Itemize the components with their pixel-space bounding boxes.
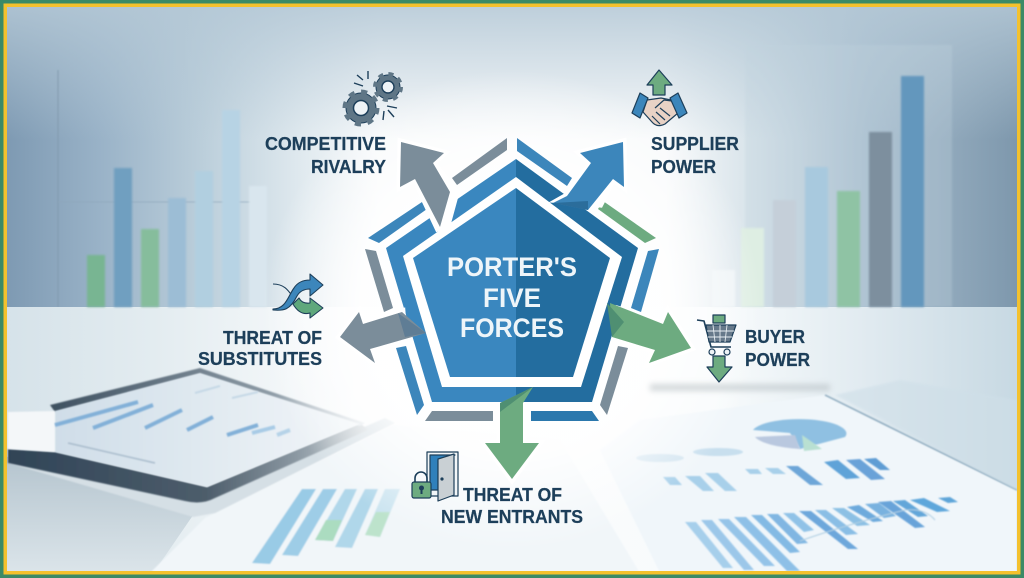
report sheet, lower right <box>600 380 1017 573</box>
label: threat of new entrants: THREAT OF <box>463 485 562 505</box>
center title: PORTER'S <box>447 252 577 282</box>
label: buyer power: POWER <box>745 350 810 370</box>
arrow: buyer power <box>607 303 691 363</box>
arrow: threat of new entrants <box>485 387 539 479</box>
label: competitive rivalry: RIVALRY <box>311 157 386 177</box>
label: threat of substitutes <box>198 328 322 369</box>
soft white glow behind diagram <box>262 70 762 550</box>
center pentagon <box>413 188 610 377</box>
arrow: competitive rivalry <box>400 142 456 228</box>
label: competitive rivalry <box>265 134 386 177</box>
icon: handshake with up arrow <box>632 70 687 126</box>
icon: shopping cart with down arrow <box>697 315 736 382</box>
outer ring segments <box>365 138 659 421</box>
label: supplier power: POWER <box>651 157 716 177</box>
icon: shuffle arrows <box>273 274 323 318</box>
pentagon diagram <box>340 138 691 479</box>
background bar chart, left <box>87 110 267 307</box>
tablet on desk <box>8 368 395 517</box>
label: supplier power: SUPPLIER <box>651 134 739 154</box>
white pentagon outline <box>403 177 622 387</box>
middle pentagon ring <box>386 159 638 402</box>
label: threat of substitutes: THREAT OF <box>223 328 322 348</box>
label: threat of new entrants <box>441 485 583 527</box>
label: supplier power <box>651 134 739 177</box>
label: threat of substitutes: SUBSTITUTES <box>198 349 322 369</box>
label: buyer power <box>745 327 810 370</box>
background bar chart, right <box>712 76 924 307</box>
label: threat of new entrants: NEW ENTRANTS <box>441 507 583 527</box>
center title: FORCES <box>460 313 564 343</box>
icon: gears <box>345 71 401 124</box>
label: buyer power: BUYER <box>745 327 805 347</box>
center title <box>447 252 577 343</box>
icon: door with padlock <box>412 452 458 501</box>
label: competitive rivalry: COMPETITIVE <box>265 134 386 154</box>
arrow: supplier power <box>553 142 624 210</box>
arrow: threat of substitutes <box>340 312 426 363</box>
report sheet, lower middle bars <box>150 425 640 573</box>
blurred pen on desk <box>650 384 830 391</box>
center title: FIVE <box>483 283 541 313</box>
